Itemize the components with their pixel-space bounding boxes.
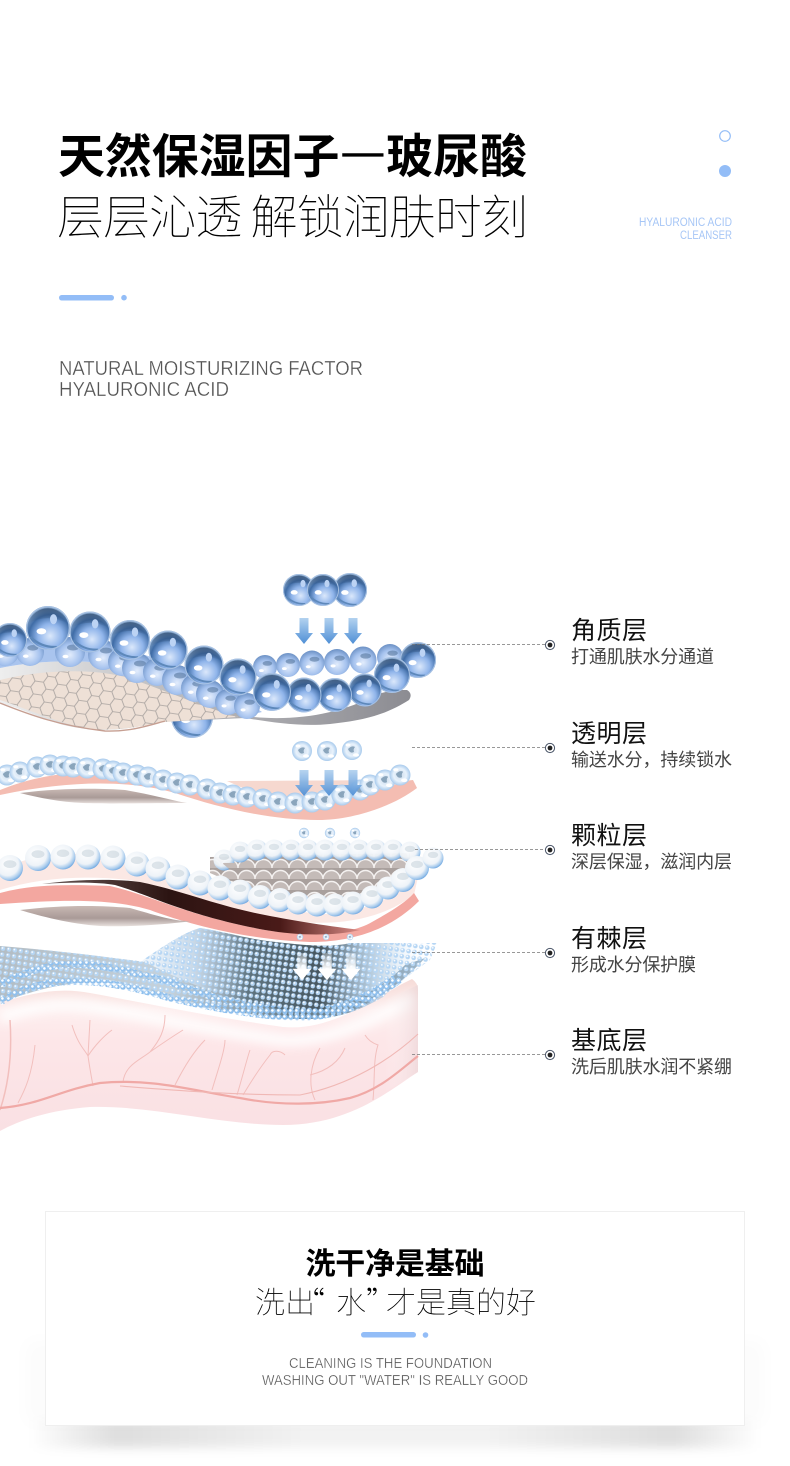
spinous layer: water mesh	[0, 928, 437, 1019]
clear layer	[0, 754, 417, 820]
falling water drops and arrows	[283, 573, 367, 980]
panel english text: CLEANING IS THE FOUNDATION	[289, 1356, 492, 1372]
decorative circles and product label	[639, 131, 732, 242]
english subtitle: HYALURONIC ACID	[59, 379, 229, 401]
granular layer: top bead row	[214, 840, 420, 870]
label: 颗粒层: 颗粒层	[571, 816, 647, 852]
label: 角质层: 角质层	[571, 611, 647, 647]
tiny drops	[297, 934, 353, 940]
small drops	[299, 828, 360, 838]
accent bar	[361, 1332, 428, 1338]
label: 基底层: 基底层	[571, 1021, 647, 1057]
granular layer	[0, 840, 444, 942]
granular layer: front bead row	[0, 844, 444, 916]
english subtitle	[59, 358, 363, 401]
large drops	[283, 573, 367, 607]
label: 透明层	[412, 714, 732, 772]
accent bar	[59, 295, 127, 301]
back row spheres	[0, 637, 403, 719]
decorative circles and product label: HYALURONIC ACID	[639, 217, 732, 229]
panel english text	[262, 1356, 528, 1389]
label: 基底层: 洗后肌肤水润不紧绷	[571, 1053, 732, 1079]
stratum corneum layer	[0, 606, 436, 738]
label: 有棘层	[412, 919, 696, 977]
label: 基底层	[412, 1021, 732, 1079]
decorative circles and product label: CLEANSER	[680, 230, 732, 242]
panel english text: WASHING OUT "WATER" IS REALLY GOOD	[262, 1373, 528, 1389]
sheet with honeycomb	[0, 661, 411, 730]
label: 有棘层: 有棘层	[571, 919, 647, 955]
label: 透明层: 输送水分，持续锁水	[571, 746, 732, 772]
panel heading: 洗干净是基础	[306, 1239, 484, 1283]
blue arrows, lower	[295, 770, 362, 796]
clear layer: bead row	[0, 754, 411, 814]
panel shadow	[25, 1340, 765, 1448]
base layer: skin block with veins	[0, 979, 418, 1131]
label: 颗粒层	[415, 816, 732, 874]
heading: bold line: 天然保湿因子—玻尿酸	[58, 118, 527, 187]
sphere under sheet	[171, 696, 213, 738]
label: 颗粒层: 深层保湿，滋润内层	[571, 848, 732, 874]
title	[57, 118, 528, 248]
white arrows	[293, 953, 360, 980]
medium drops	[292, 740, 362, 761]
diagram: skin layers	[0, 573, 444, 1131]
blue arrows, upper	[295, 618, 362, 644]
water band behind spheres	[0, 638, 262, 716]
label: 有棘层: 形成水分保护膜	[571, 951, 696, 977]
front row spheres	[0, 606, 436, 712]
panel subheading: 洗出“水”才是真的好	[255, 1278, 536, 1322]
heading: light line: 层层沁透 解锁润肤时刻	[57, 179, 528, 248]
label: 透明层: 透明层	[571, 714, 647, 750]
label: 角质层: 打通肌肤水分通道	[571, 643, 714, 669]
panel: cleaning foundation	[25, 1212, 765, 1448]
label: 角质层	[412, 611, 714, 669]
english subtitle: NATURAL MOISTURIZING FACTOR	[59, 358, 363, 380]
layer labels	[412, 611, 732, 1079]
panel card	[46, 1212, 744, 1426]
